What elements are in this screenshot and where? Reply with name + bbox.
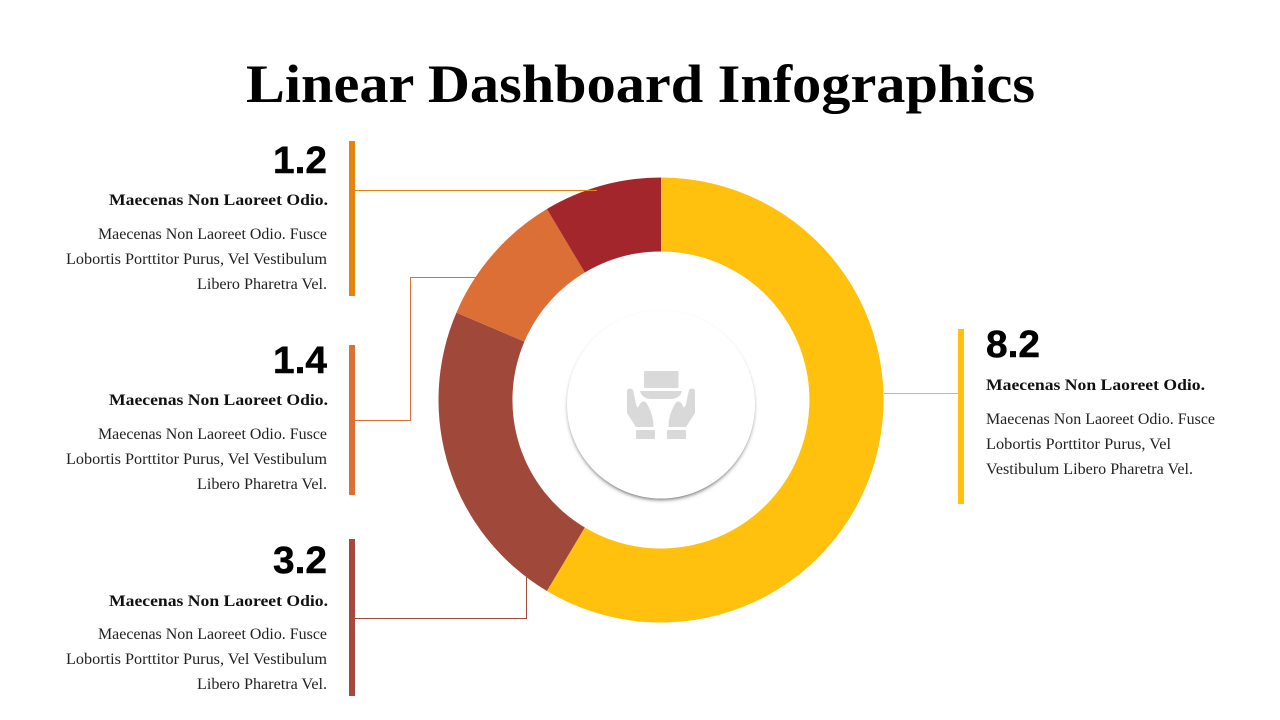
text block 8.2 bbox=[986, 324, 1215, 478]
text block 1.2 bbox=[66, 140, 328, 293]
icon: hands holding hat bbox=[627, 371, 695, 439]
text block 8.2: Maecenas Non Laoreet Odio. Fusce bbox=[986, 411, 1215, 428]
leader line 1.4 bbox=[355, 278, 477, 420]
bar 1.4 bbox=[349, 345, 355, 495]
segment: 1.4 orange bbox=[456, 209, 585, 342]
center circle bbox=[567, 310, 755, 500]
text block 8.2: 8.2 bbox=[986, 324, 1040, 366]
text block 3.2: Lobortis Porttitor Purus, Vel Vestibulum bbox=[66, 651, 327, 668]
leader line 3.2 bbox=[355, 577, 526, 618]
leader line 1.2 bbox=[355, 190, 597, 192]
text block 1.4: Maecenas Non Laoreet Odio. bbox=[109, 392, 328, 409]
text block 1.4 bbox=[66, 340, 328, 493]
text block 1.2: Libero Pharetra Vel. bbox=[197, 276, 327, 293]
text block 1.2: Maecenas Non Laoreet Odio. Fusce bbox=[98, 226, 327, 243]
title: Linear Dashboard Infographics bbox=[246, 54, 1035, 114]
text block 1.2: 1.2 bbox=[273, 140, 327, 182]
text block 3.2: Maecenas Non Laoreet Odio. bbox=[109, 593, 328, 610]
leader line 8.2 bbox=[884, 392, 958, 394]
text block 1.4: Lobortis Porttitor Purus, Vel Vestibulum bbox=[66, 451, 327, 468]
text block 1.4: Libero Pharetra Vel. bbox=[197, 476, 327, 493]
text block 1.2: Lobortis Porttitor Purus, Vel Vestibulum bbox=[66, 251, 327, 268]
text block 3.2 bbox=[66, 540, 328, 693]
text block 1.2: Maecenas Non Laoreet Odio. bbox=[109, 192, 328, 209]
text block 8.2: Lobortis Porttitor Purus, Vel bbox=[986, 436, 1171, 453]
segment: 3.2 brown bbox=[439, 313, 585, 591]
segment: 8.2 yellow bbox=[547, 178, 884, 622]
text block 1.4: 1.4 bbox=[273, 340, 327, 382]
text block 3.2: Maecenas Non Laoreet Odio. Fusce bbox=[98, 626, 327, 643]
segment: 1.2 red bbox=[547, 178, 661, 272]
bar 8.2 bbox=[958, 329, 964, 504]
bar 3.2 bbox=[349, 539, 355, 696]
text block 1.4: Maecenas Non Laoreet Odio. Fusce bbox=[98, 426, 327, 443]
text block 3.2: 3.2 bbox=[273, 540, 327, 582]
text block 8.2: Vestibulum Libero Pharetra Vel. bbox=[986, 461, 1193, 478]
bar 1.2 bbox=[349, 141, 355, 296]
text block 8.2: Maecenas Non Laoreet Odio. bbox=[986, 377, 1205, 394]
text block 3.2: Libero Pharetra Vel. bbox=[197, 676, 327, 693]
donut chart bbox=[439, 178, 884, 622]
